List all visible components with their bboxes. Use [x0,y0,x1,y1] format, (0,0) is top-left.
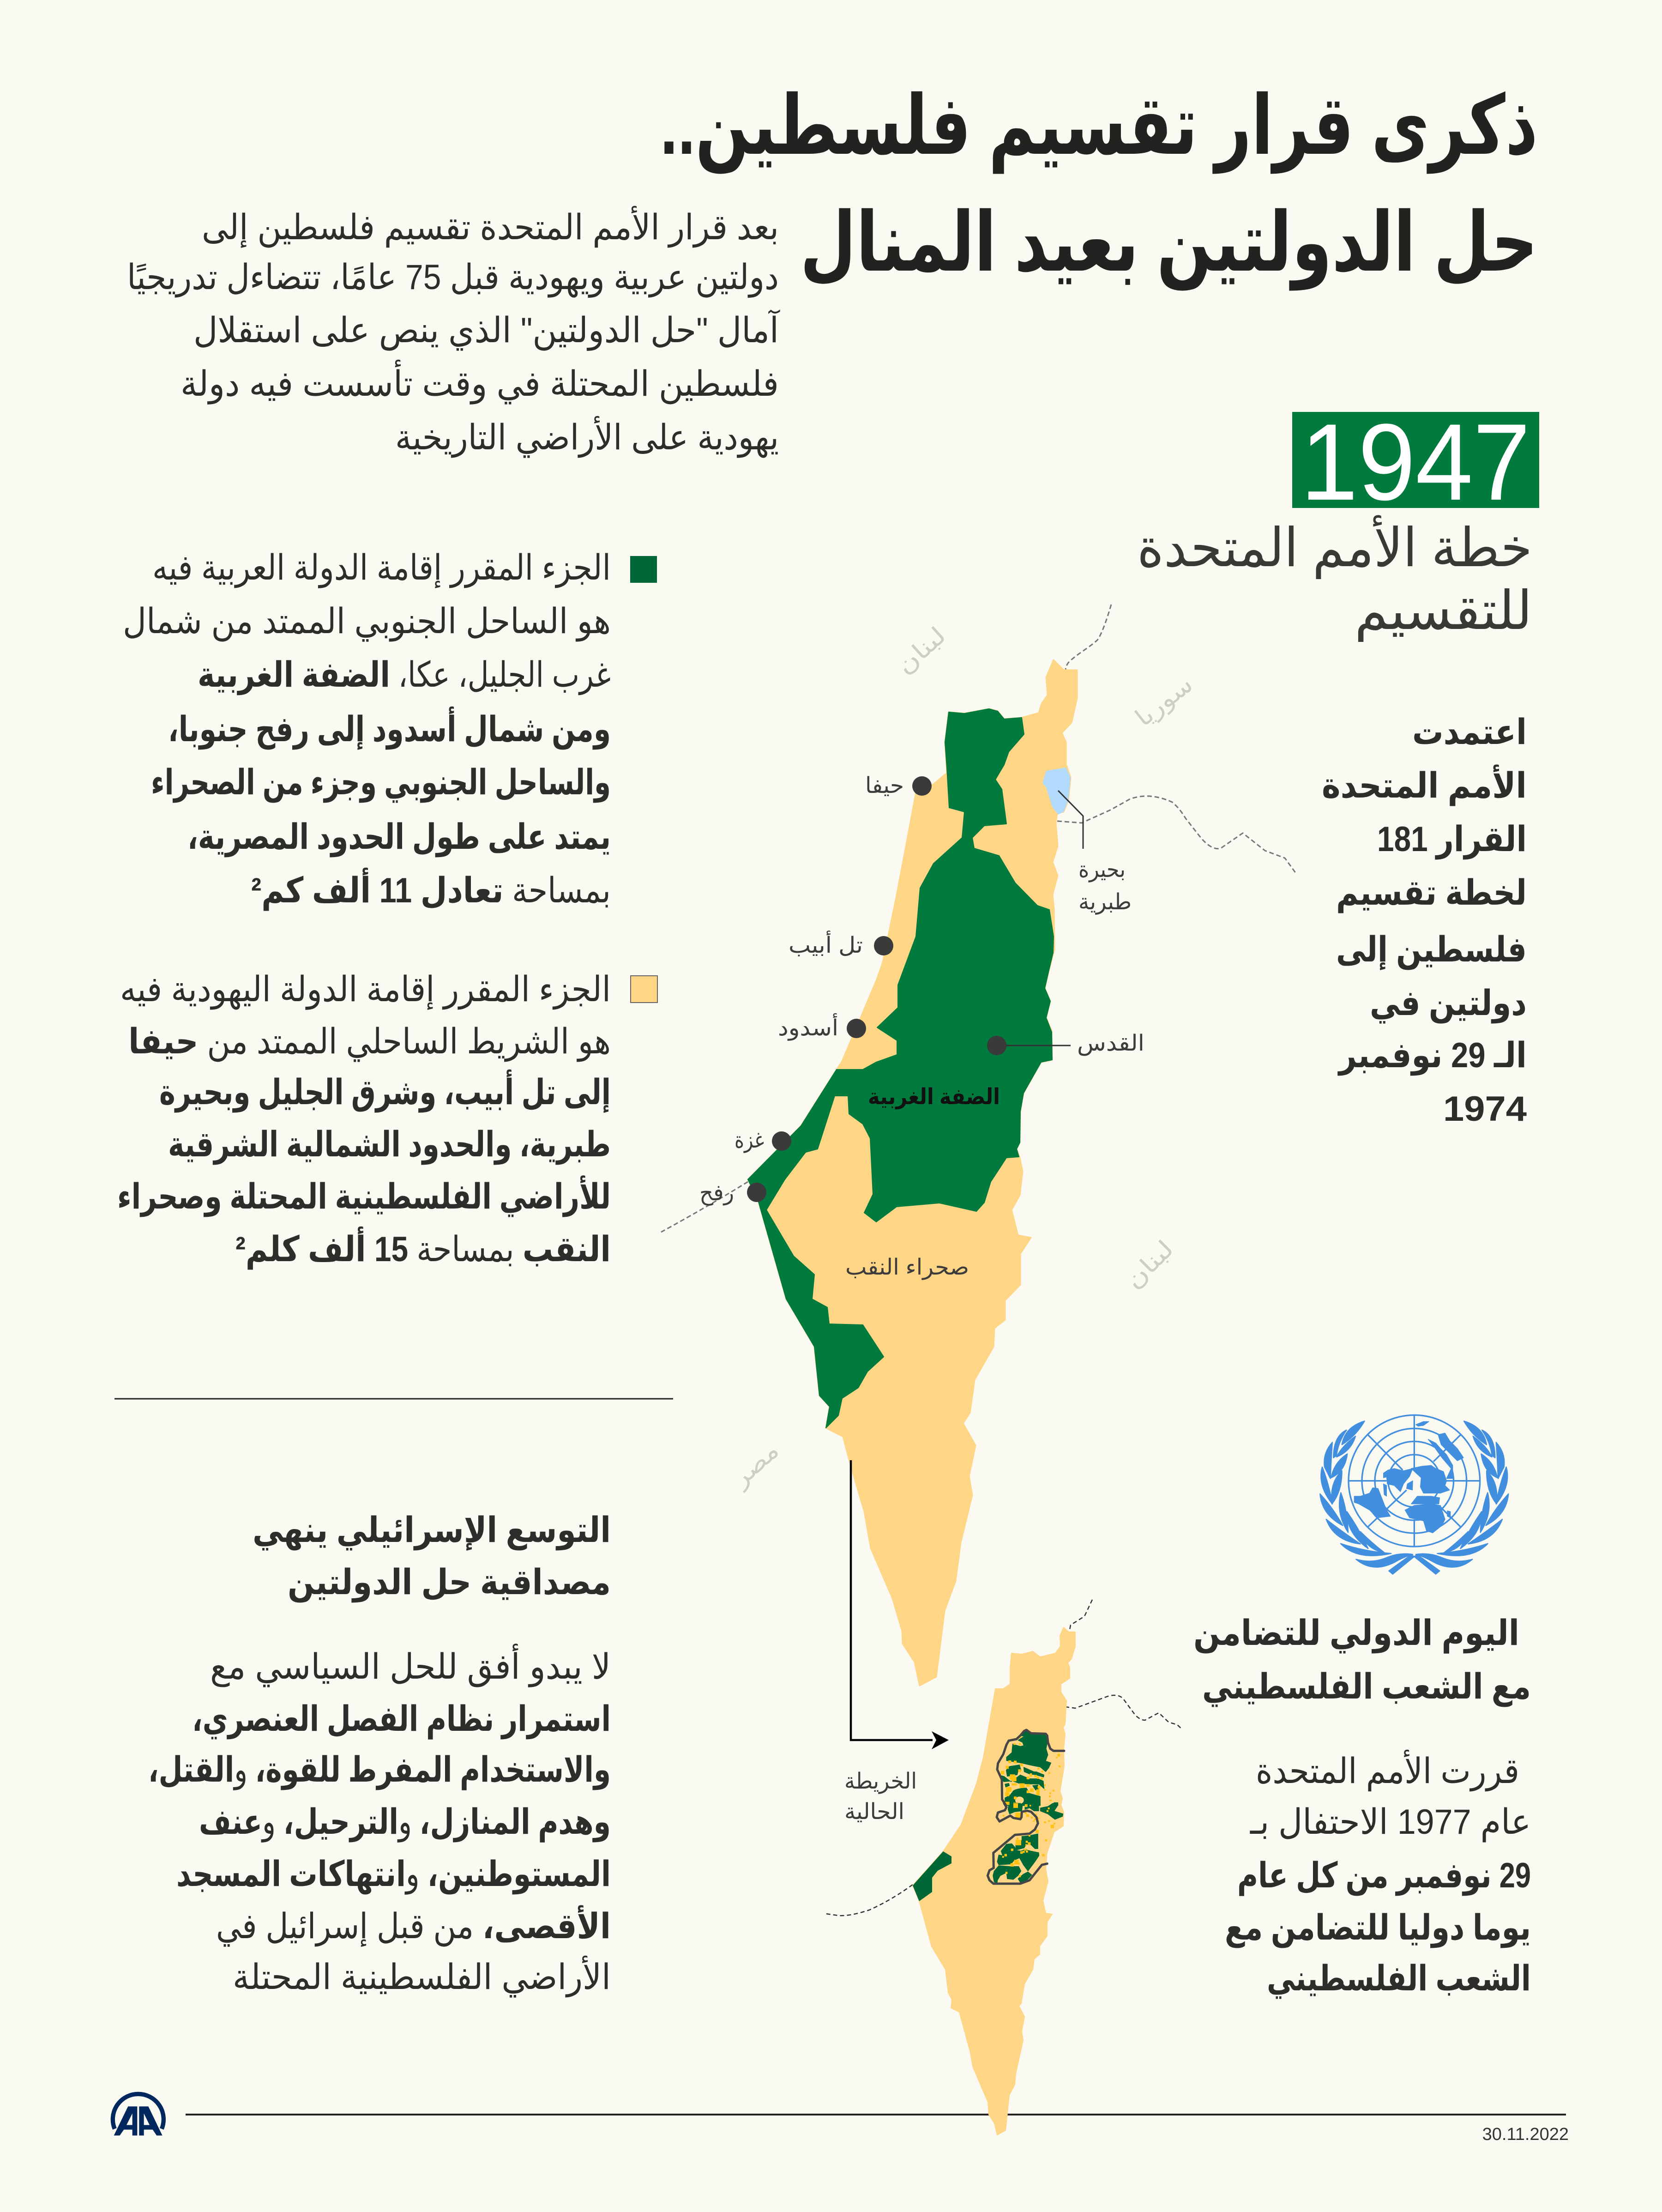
west bank outline [988,1730,1064,1884]
intro text block [127,206,780,458]
city labels [699,774,1144,1280]
current map borders dashed [825,1600,1182,1916]
legend text Arab state: الجزء المقرر إقامة الدولة العربية فيه [152,548,611,588]
text block: solidarity day: يوما دوليا للتضامن مع [1225,1908,1531,1948]
legend text Arab state: بمساحة تعادل 11 ألف كم² [251,867,611,911]
footer line [186,2114,1566,2115]
current map territory [913,1627,1075,2135]
heading: solidarity day: اليوم الدولي للتضامن [1193,1614,1519,1654]
plan heading [1137,515,1532,642]
intro text block: يهودية على الأراضي التاريخية [395,416,779,458]
legend swatch green [630,556,657,583]
continents [1354,1421,1463,1533]
legend text Jewish state: هو الشريط الساحلي الممتد من حيفا [128,1022,611,1062]
legend text Jewish state: للأراضي الفلسطينية المحتلة وصحراء [117,1175,611,1217]
current map label: الخريطة [844,1769,917,1794]
text block: Israeli expansion: لا يبدو أفق للحل السياسي مع [210,1644,611,1687]
lake tiberias [1042,768,1071,815]
city labels: رفح [699,1181,734,1206]
text block: solidarity day: الشعب الفلسطيني [1267,1959,1531,1999]
text block: Israeli expansion: الأراضي الفلسطينية المحتلة [233,1956,611,1998]
neighbouring country labels: لبنان [1120,1235,1179,1294]
text block: Israeli expansion: الأقصى، من قبل إسرائيل في [216,1905,611,1947]
text block: solidarity day [1225,1750,1531,1999]
neighbouring country labels: لبنان [891,622,951,680]
legend text Arab state: ومن شمال أسدود إلى رفح جنوبا، [168,706,611,750]
text block: Israeli expansion: والاستخدام المفرط للقوة، والقتل، [148,1750,611,1790]
jerusalem leader line [997,1045,1071,1046]
map borders dashed [661,604,1296,1232]
resolution text: 1974 [1443,1089,1527,1129]
legend: Jewish state [117,970,657,1270]
resolution text: دولتين في [1370,984,1527,1024]
city labels: بحيرة [1078,858,1126,882]
text block: Israeli expansion: وهدم المنازل، والترحيل، وعنف [199,1802,611,1843]
laurel left [1320,1421,1414,1574]
intro text block: آمال "حل الدولتين" الذي ينص على استقلال [193,309,780,351]
legend text Arab state: هو الساحل الجنوبي الممتد من شمال [123,602,611,642]
current map label [844,1769,917,1824]
legend: Arab state [123,548,657,911]
map territory green [748,709,1054,1428]
city labels: القدس [1077,1031,1144,1056]
heading: solidarity day [1193,1614,1531,1707]
neighbouring country labels: سوريا [1131,671,1198,732]
legend text Arab state: والساحل الجنوبي وجزء من الصحراء [151,763,611,803]
resolution text: فلسطين إلى [1336,930,1527,970]
resolution text: الأمم المتحدة [1322,764,1527,806]
plan heading: خطة الأمم المتحدة [1137,515,1532,579]
title [660,79,1538,291]
lake leader line [1058,791,1083,849]
city labels: الضفة الغربية [868,1085,1000,1110]
west bank north fragments [1001,1730,1060,1806]
globe grid [1349,1415,1480,1547]
resolution text: الـ 29 نوفمبر [1337,1036,1527,1076]
heading: Israeli expansion: التوسع الإسرائيلي ينهي [253,1511,611,1551]
plan heading: للتقسيم [1355,580,1532,642]
city labels: حيفا [865,774,904,798]
heading: Israeli expansion: مصداقية حل الدولتين [288,1563,611,1603]
legend text Arab state: يمتد على طول الحدود المصرية، [187,817,611,858]
resolution text [1322,713,1527,1129]
legend text Jewish state: الجزء المقرر إقامة الدولة اليهودية فيه [120,970,611,1010]
resolution text: اعتمدت [1412,713,1527,752]
legend text Jewish state [117,970,611,1270]
text block: solidarity day: قررت الأمم المتحدة [1256,1750,1519,1792]
icon: AA logo [113,2094,163,2135]
date: 30.11.2022 [1482,2125,1569,2144]
text block: Israeli expansion: المستوطنين، وانتهاكات المسجد [176,1855,611,1895]
city labels: غزة [735,1128,764,1153]
arrow to current map [851,1460,949,1749]
text block: solidarity day: 29 نوفمبر من كل عام [1237,1856,1531,1896]
west bank south fragments [993,1803,1063,1883]
map: 1947 partition plan [661,604,1296,1686]
city dots [747,776,1006,1202]
gaza strip [913,1851,951,1901]
city labels: تل أبيب [789,931,863,958]
city labels: أسدود [778,1013,838,1041]
text block: solidarity day: عام 1977 الاحتفال بـ [1250,1802,1531,1842]
laurel right [1414,1421,1508,1574]
icon: UN emblem [1320,1415,1508,1574]
legend text Arab state: غرب الجليل، عكا، الضفة الغربية [198,655,611,695]
text block: Israeli expansion: استمرار نظام الفصل العنصري، [192,1699,611,1740]
current map label: الحالية [844,1800,904,1824]
intro text block: فلسطين المحتلة في وقت تأسست فيه دولة [181,360,779,405]
heading: Israeli expansion [253,1511,611,1603]
resolution text: القرار 181 [1377,820,1527,860]
resolution text: لخطة تقسيم [1336,873,1527,913]
city labels: صحراء النقب [845,1255,969,1280]
text block: Israeli expansion [148,1644,611,1998]
year badge 1947: 1947 [1301,401,1530,523]
neighbouring country labels: مصر [726,1437,784,1493]
neighbouring country labels [726,622,1198,1493]
map: current [825,1600,1182,2135]
intro text block: بعد قرار الأمم المتحدة تقسيم فلسطين إلى [202,206,779,248]
legend text Jewish state: طبرية، والحدود الشمالية الشرقية [168,1125,611,1165]
legend text Arab state [123,548,611,911]
legend swatch yellow [631,976,657,1003]
heading: solidarity day: مع الشعب الفلسطيني [1202,1667,1531,1707]
legend text Jewish state: النقب بمساحة 15 ألف كلم² [235,1226,611,1270]
legend text Jewish state: إلى تل أبيب، وشرق الجليل وبحيرة [159,1069,611,1113]
city labels: طبرية [1078,890,1132,915]
intro text block: دولتين عربية ويهودية قبل 75 عامًا، تتضاءل تدريجيًا [127,258,779,298]
map territory yellow [748,660,1077,1686]
